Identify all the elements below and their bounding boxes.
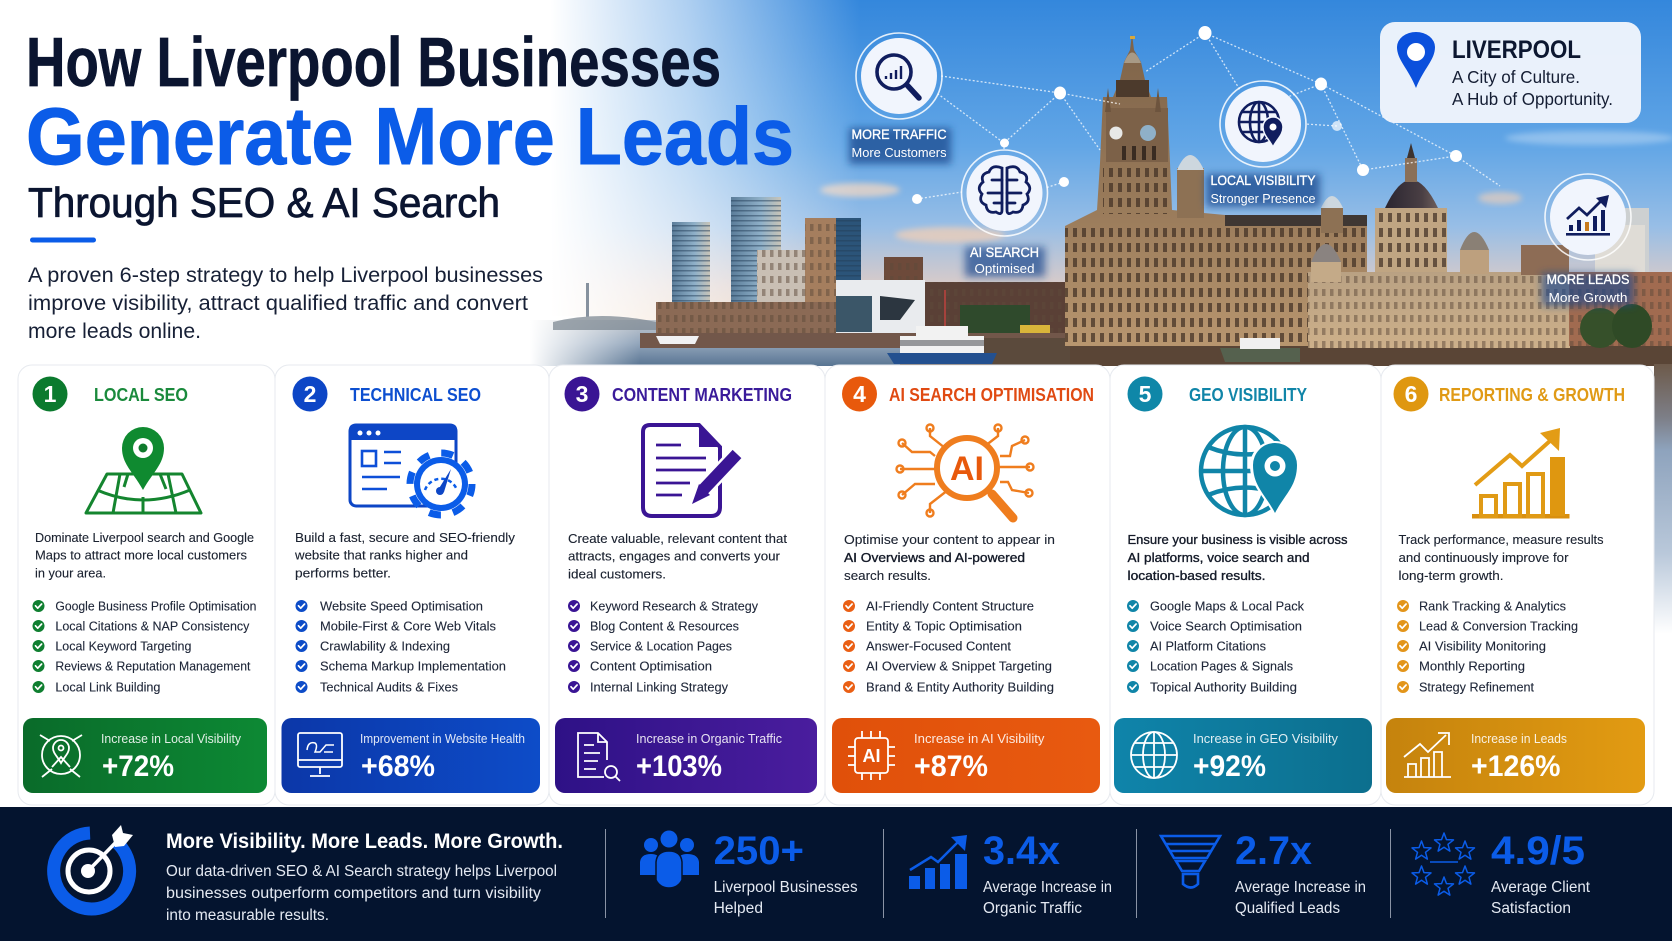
checklist: Local Link Building: [55, 680, 160, 694]
checklist: Rank Tracking & Analytics: [1419, 600, 1566, 614]
checklist: Google Business Profile Optimisation: [55, 600, 256, 614]
stat: +72%: [23, 718, 267, 793]
panel: 2 Technical SEO: Build a fast, secure and SEO-friendly: [295, 530, 516, 545]
intro paragraph: improve visibility, attract qualified traffic and convert: [28, 292, 528, 315]
checklist: [843, 600, 1054, 694]
checklist: Monthly Reporting: [1419, 660, 1525, 674]
stat: 2.7x qualified leads: 2.7x: [1235, 829, 1312, 873]
stat: 3.4x organic traffic: 3.4x: [983, 829, 1060, 873]
panel: 4 AI Search Optimisation: search results.: [844, 568, 931, 583]
checklist: AI Visibility Monitoring: [1419, 640, 1546, 654]
intro paragraph: A proven 6-step strategy to help Liverpool businesses: [28, 264, 543, 287]
quay: [640, 333, 1070, 348]
heading: Generate More Leads: [26, 92, 794, 182]
badge: AI Search: [962, 150, 1048, 277]
checklist: Internal Linking Strategy: [590, 680, 729, 694]
icon: brain: [979, 167, 1030, 214]
location card: Liverpool: LIVERPOOL: [1452, 36, 1581, 64]
panel: 4 AI Search Optimisation: 4: [853, 381, 866, 407]
stat: 4.9/5 satisfaction: [1412, 829, 1591, 917]
checklist: [296, 600, 506, 694]
right edge water strip: [1654, 364, 1672, 634]
icon: location pin: [1397, 32, 1435, 88]
stat: +92%: [1114, 718, 1372, 793]
checklist: [1397, 600, 1578, 694]
panel: 6 Reporting & Growth: [1381, 365, 1654, 805]
footer band: into measurable results.: [166, 907, 329, 924]
stat: +103%: Increase in Organic Traffic: [636, 732, 782, 746]
panel: 3 Content Marketing: Create valuable, relevant content that: [568, 531, 787, 546]
icon: globe with pin: [1201, 427, 1300, 517]
panel: 4 AI Search Optimisation: AI Overviews and AI-powered: [844, 550, 1025, 565]
checklist: [568, 600, 759, 694]
stat: +68%: [282, 718, 540, 793]
panel: 5 GEO Visibility: location-based results.: [1128, 568, 1266, 583]
badge: More Leads: More Growth: [1548, 290, 1628, 305]
stat: +87%: Increase in AI Visibility: [914, 732, 1045, 746]
panel: 1 Local SEO: [18, 365, 275, 805]
footer band: businesses outperform competitors and turn visibility: [166, 885, 541, 902]
checklist: Technical Audits & Fixes: [320, 680, 458, 694]
stat: 250+ businesses: 250+: [714, 829, 804, 873]
badge: More Traffic: More Customers: [852, 145, 947, 160]
checklist: Keyword Research & Strategy: [590, 600, 759, 614]
stat: 3.4x organic traffic: Average Increase in: [983, 879, 1112, 896]
icon: globe with pin: [1239, 102, 1283, 147]
heading: Through SEO & AI Search: [28, 179, 500, 226]
checklist: Google Maps & Local Pack: [1150, 600, 1305, 614]
footer band: [0, 807, 1672, 941]
badge: More Leads: MORE LEADS: [1546, 272, 1630, 287]
stat: +68%: Improvement in Website Health: [360, 732, 525, 746]
checklist: Reviews & Reputation Management: [55, 660, 251, 674]
checklist: Local Keyword Targeting: [55, 640, 191, 654]
network nodes: [912, 26, 1462, 204]
stat: 250+ businesses: [640, 829, 858, 917]
stat: +87%: +87%: [914, 750, 988, 783]
icon: bar chart with arrow: [1472, 428, 1570, 518]
left skyline towers: [656, 197, 1065, 342]
panel: 1 Local SEO: Dominate Liverpool search and Google: [35, 530, 254, 545]
panel: 2 Technical SEO: website that ranks higher and: [294, 548, 468, 562]
icon: AI magnifier circuit: [896, 424, 1034, 518]
stat: 4.9/5 satisfaction: 4.9/5: [1491, 829, 1585, 873]
stat: 4.9/5 satisfaction: Average Client: [1491, 879, 1591, 896]
icon: rising bars: [909, 835, 967, 889]
checklist: Service & Location Pages: [590, 640, 732, 654]
badge: More Traffic: MORE TRAFFIC: [852, 127, 947, 142]
ferry: [887, 290, 1300, 364]
hero photo: Liverpool waterfront skyline: [0, 0, 1672, 366]
panel: 5 GEO Visibility: GEO VISIBILITY: [1189, 385, 1307, 405]
icon: target with arrow: [54, 825, 133, 909]
heading: How Liverpool Businesses: [26, 23, 721, 101]
panel: 3 Content Marketing: 3: [576, 381, 588, 407]
location card: Liverpool: A Hub of Opportunity.: [1452, 89, 1613, 109]
icon: people: [640, 830, 699, 888]
badge: AI Search: AI SEARCH: [970, 245, 1039, 260]
checklist: Strategy Refinement: [1419, 680, 1535, 694]
stat: 2.7x qualified leads: Average Increase in: [1235, 879, 1366, 896]
boat: [656, 336, 699, 344]
checklist: AI-Friendly Content Structure: [866, 600, 1034, 614]
checklist: Lead & Conversion Tracking: [1419, 620, 1578, 634]
panel: 4 AI Search Optimisation: Optimise your content to appear in: [844, 532, 1055, 547]
checklist: Location Pages & Signals: [1150, 660, 1293, 674]
stat: +92%: Increase in GEO Visibility: [1193, 732, 1339, 746]
checklist: AI Platform Citations: [1150, 640, 1266, 654]
stat: +72%: Increase in Local Visibility: [101, 732, 242, 746]
badge: AI Search: Optimised: [974, 261, 1034, 276]
badge: More Leads: [1542, 174, 1634, 306]
icon: document with pencil: [643, 425, 737, 516]
heading: [26, 23, 794, 226]
stat: 3.4x organic traffic: [909, 829, 1112, 917]
panel: 3 Content Marketing: attracts, engages and converts your: [568, 548, 781, 564]
checklist: Answer-Focused Content: [866, 640, 1012, 654]
checklist: [1127, 600, 1305, 694]
location card: Liverpool: [1380, 22, 1641, 123]
panel: 5 GEO Visibility: 5: [1139, 381, 1152, 407]
panel: 2 Technical SEO: [275, 365, 549, 805]
icon: magnifier with chart: [877, 55, 919, 98]
badge: Local Visibility: LOCAL VISIBILITY: [1210, 173, 1316, 188]
panel: 1 Local SEO: in your area.: [35, 566, 106, 580]
panel: 6 Reporting & Growth: REPORTING & GROWTH: [1439, 385, 1625, 405]
panel: 4 AI Search Optimisation: [825, 365, 1110, 805]
panel: 3 Content Marketing: [549, 365, 825, 805]
Port of Liverpool Building: [1308, 143, 1570, 348]
stat: +68%: +68%: [361, 750, 435, 783]
stat: +87%: [832, 718, 1100, 793]
stat: +126%: Increase in Leads: [1471, 732, 1567, 746]
panel: 5 GEO Visibility: [1110, 365, 1381, 805]
stat: 250+ businesses: Helped: [714, 900, 763, 917]
bridge and spire: [553, 283, 656, 330]
right background buildings: [1521, 208, 1672, 348]
checklist: Content Optimisation: [590, 660, 712, 674]
stat: +126%: +126%: [1471, 750, 1560, 783]
stat: 250+ businesses: Liverpool Businesses: [714, 879, 858, 896]
stat: 2.7x qualified leads: [1161, 829, 1366, 917]
checklist: AI Overview & Snippet Targeting: [866, 660, 1052, 674]
checklist: Schema Markup Implementation: [320, 660, 506, 674]
panel: 2 Technical SEO: performs better.: [295, 566, 391, 580]
water: [530, 320, 1150, 366]
badge: More Traffic: [849, 33, 951, 164]
panel: 3 Content Marketing: CONTENT MARKETING: [612, 385, 792, 405]
panel: 5 GEO Visibility: AI platforms, voice search and: [1128, 550, 1310, 565]
footer band: More Visibility. More Leads. More Growth.: [166, 830, 563, 853]
badge: Local Visibility: [1206, 81, 1320, 207]
icon: stars: [1412, 833, 1475, 895]
panel: 6 Reporting & Growth: and continuously improve for: [1398, 550, 1569, 565]
icon: funnel: [1161, 836, 1220, 888]
checklist: Voice Search Optimisation: [1150, 620, 1302, 634]
icon: browser with gauge: [349, 424, 472, 515]
panel: 2 Technical SEO: TECHNICAL SEO: [350, 385, 481, 405]
checklist: Blog Content & Resources: [590, 620, 739, 634]
checklist: Website Speed Optimisation: [320, 600, 483, 614]
panel: 4 AI Search Optimisation: AI SEARCH OPTIMISATION: [889, 385, 1094, 405]
checklist: Local Citations & NAP Consistency: [55, 620, 250, 634]
intro paragraph: [28, 264, 543, 343]
heading accent rule: [30, 238, 96, 242]
icon: AI magnifier circuit: AI: [950, 450, 984, 488]
stat: +72%: +72%: [102, 750, 174, 783]
checklist: Crawlability & Indexing: [320, 640, 450, 654]
panel: 1 Local SEO: 1: [44, 381, 57, 407]
badge: Local Visibility: Stronger Presence: [1210, 191, 1316, 206]
location card: Liverpool: A City of Culture.: [1452, 67, 1580, 87]
checklist: Entity & Topic Optimisation: [866, 620, 1022, 634]
stat: 3.4x organic traffic: Organic Traffic: [983, 900, 1082, 917]
panel: 6 Reporting & Growth: 6: [1405, 381, 1417, 407]
panel: 6 Reporting & Growth: long-term growth.: [1398, 568, 1504, 583]
checklist: Brand & Entity Authority Building: [866, 680, 1054, 694]
checklist: Topical Authority Building: [1150, 680, 1297, 694]
Royal Liver Building: [1065, 34, 1367, 346]
stat: +92%: +92%: [1193, 750, 1266, 783]
panel: 1 Local SEO: Maps to attract more local customers: [35, 548, 247, 562]
stat: +87%: AI: [862, 746, 880, 766]
network connection lines: [917, 33, 1500, 199]
panel: 1 Local SEO: LOCAL SEO: [94, 385, 188, 405]
icon: map with pin: [86, 427, 201, 513]
panel: 2 Technical SEO: 2: [304, 381, 316, 407]
stat: +126%: [1386, 718, 1645, 793]
intro paragraph: more leads online.: [28, 320, 201, 343]
stat: +103%: [555, 718, 817, 793]
checklist: [32, 600, 256, 694]
checklist: Mobile-First & Core Web Vitals: [320, 620, 496, 634]
stat: 4.9/5 satisfaction: Satisfaction: [1491, 900, 1571, 917]
icon: growth chart: [1566, 195, 1610, 236]
footer band: Our data-driven SEO & AI Search strategy helps Liverpool: [166, 863, 557, 880]
panel: 5 GEO Visibility: Ensure your business is visible across: [1128, 532, 1348, 547]
panel: 6 Reporting & Growth: Track performance, measure results: [1398, 532, 1604, 547]
stat: 2.7x qualified leads: Qualified Leads: [1235, 900, 1340, 917]
panel: 3 Content Marketing: ideal customers.: [568, 566, 666, 582]
stat: +103%: +103%: [636, 750, 722, 783]
